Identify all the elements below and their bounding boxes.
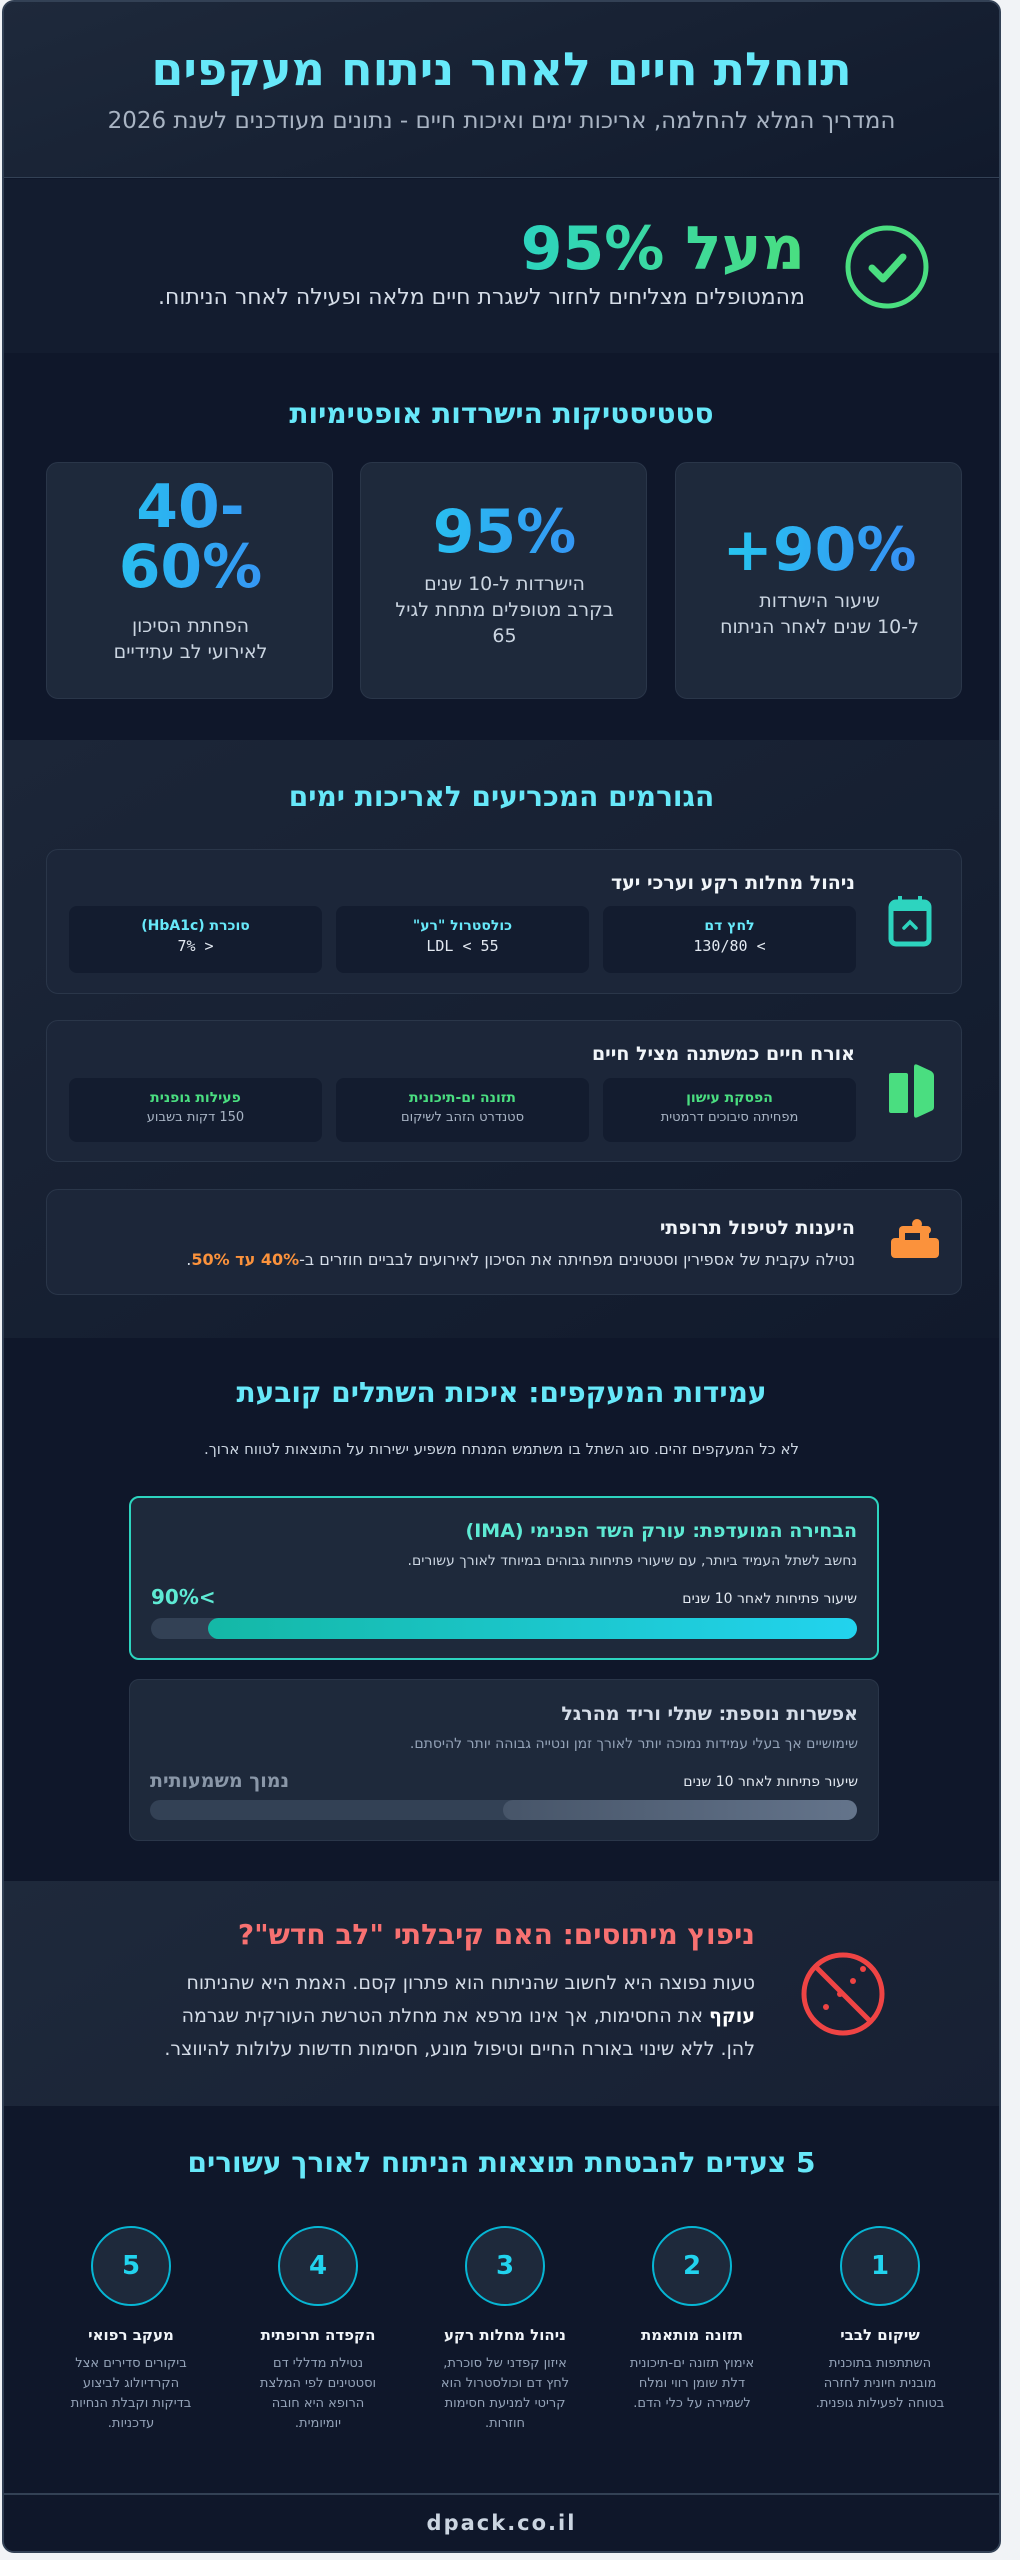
myth body: טעות נפוצה היא לחשוב שהניתוח הוא פתרון קסם. האמת היא שהניתוח <box>187 1972 755 1994</box>
stat card 2 <box>360 462 647 699</box>
step 4 <box>260 2226 376 2431</box>
subtitle: המדריך המלא להחלמה, אריכות ימים ואיכות חיים - נתונים מעודכנים לשנת 2026 <box>108 108 895 134</box>
header section <box>4 2 999 178</box>
step 1: 1 <box>871 2251 889 2281</box>
step 5: הקרדיולוג לביצוע <box>83 2376 179 2391</box>
sub box: diet: תזונה ים-תיכונית <box>409 1090 516 1106</box>
graft card: vein: שימושיים אך בעלי עמידות נמוכה יותר לאורך זמן ונטייה גבוהה יותר להיסתם. <box>410 1736 858 1752</box>
step 2: לשמירה על כלי הדם. <box>633 2396 751 2411</box>
heading: הגורמים המכריעים לאריכות ימים <box>289 780 714 813</box>
step 4: יומיומית. <box>295 2416 341 2431</box>
progress bar vein <box>150 1800 857 1820</box>
step 1: מובנית חיונית לחזרה <box>824 2376 936 2391</box>
step 5: 5 <box>122 2251 140 2281</box>
step 2: אימוץ תזונה ים-תיכונית <box>630 2356 754 2371</box>
myth body: עוקף את החסימות, אך אינו מרפא את מחלת הטרשת העורקית שגרמה <box>182 2005 755 2027</box>
title: אורח חיים כמשתנה מציל חיים <box>592 1043 855 1065</box>
heading: 5 צעדים להבטחת תוצאות הניתוח לאורך עשורים <box>187 2146 816 2179</box>
myth body <box>164 1972 755 2060</box>
section: graft durability <box>4 1338 999 1881</box>
step 3: 3 <box>496 2251 514 2281</box>
stat card 2: 95% <box>433 497 576 567</box>
sub box: smoking: הפסקת עישון <box>686 1090 773 1106</box>
icon: ban circle <box>802 1952 884 2036</box>
stat card 1: +90% <box>723 515 916 585</box>
step 1: השתתפות בתוכנית <box>829 2356 931 2371</box>
graft card: IMA: שיעור פתיחות לאחר 10 שנים <box>682 1591 857 1607</box>
sub box: blood pressure: 130/80 < <box>693 937 766 955</box>
step 3: חוזרות. <box>485 2416 525 2431</box>
stat card 3: 40- <box>136 472 245 542</box>
step 5: מעקב רפואי <box>88 2326 174 2344</box>
stat card 2: 65 <box>492 625 517 647</box>
progress bar IMA <box>151 1618 857 1639</box>
stat card 3: לאירועי לב עתידיים <box>114 641 267 663</box>
sub box: activity <box>69 1078 322 1142</box>
section: longevity factors <box>4 740 999 1338</box>
factor card 2 <box>46 1020 962 1162</box>
sub box: cholesterol: כולסטרול "רע" <box>413 918 512 934</box>
stat card 1: שיעור הישרדות <box>759 590 880 612</box>
myth heading: ניפוץ מיתוסים: האם קיבלתי "לב חדש"? <box>238 1918 755 1951</box>
stat card 2: הישרדות ל-10 שנים <box>424 573 585 595</box>
step 3: ניהול מחלות רקע <box>444 2326 566 2344</box>
step 1: בטוחה לפעילות גופנית. <box>816 2396 944 2411</box>
section: myth busting <box>4 1881 999 2106</box>
step 2: 2 <box>683 2251 701 2281</box>
icon: medicine bag <box>891 1219 939 1258</box>
sub box: blood pressure: לחץ דם <box>704 918 755 934</box>
title: היענות לטיפול תרופתי <box>660 1217 855 1239</box>
sub box: cholesterol: LDL < 55 <box>426 937 499 955</box>
sub box: activity: 150 דקות בשבוע <box>147 1110 244 1125</box>
graft card: IMA: 90%< <box>151 1585 216 1609</box>
description: נטילה עקבית של אספירין וסטטינים מפחיתה את הסיכון לאירועים לבביים חוזרים ב-40% עד 50%. <box>186 1250 855 1269</box>
step 5: ביקורים סדירים אצל <box>75 2356 187 2371</box>
heading: סטטיסטיקות הישרדות אופטימיות <box>289 397 714 430</box>
step 4: 4 <box>309 2251 327 2281</box>
sub box: cholesterol <box>336 906 589 973</box>
sub box: sugar: סוכרת (HbA1c) <box>141 918 250 934</box>
step 2: דלת שומן רווי ומלח <box>639 2376 745 2391</box>
stat card 3: הפחתת הסיכון <box>132 615 249 637</box>
graft card: vein: אפשרות נוספת: שתלי וריד מהרגל <box>561 1703 858 1725</box>
hero stat section <box>4 179 999 353</box>
sub box: sugar <box>69 906 322 973</box>
step 4: הרופא היא חובה <box>272 2396 364 2411</box>
graft card: IMA <box>129 1496 879 1660</box>
icon: calendar <box>888 896 932 946</box>
stat card 1 <box>675 462 962 699</box>
step 5: בדיקות וקבלת הנחיות <box>71 2396 191 2411</box>
intro text: לא כל המעקפים זהים. סוג השתל בו משתמש המנתח משפיע ישירות על התוצאות לטווח ארוך. <box>204 1440 799 1458</box>
step 2: תזונה מותאמת <box>641 2326 743 2344</box>
sub box: activity: פעילות גופנית <box>150 1090 241 1106</box>
stat card 3: 60% <box>119 532 262 602</box>
hero description: מהמטופלים מצליחים לחזור לשגרת חיים מלאה ופעילה לאחר הניתוח. <box>158 285 805 310</box>
sub box: smoking <box>603 1078 856 1142</box>
graft card: IMA: נחשב לשתל העמיד ביותר, עם שיעורי פתיחות גבוהים במיוחד לאורך עשורים. <box>408 1553 857 1569</box>
icon: check circle <box>846 226 928 308</box>
factor card 3 <box>46 1189 962 1295</box>
icon: green bars <box>889 1064 934 1118</box>
step 4: וסטטינים לפי המלצת <box>260 2376 376 2391</box>
step 2 <box>630 2226 754 2411</box>
step 5 <box>70 2226 191 2431</box>
stat card 2: בקרב מטופלים מתחת לגיל <box>395 599 614 621</box>
stat card 3 <box>46 462 333 699</box>
sub box: diet: סטנדרט הזהב לשיקום <box>401 1110 524 1125</box>
step 3: לחץ דם וכולסטרול הוא <box>441 2376 569 2391</box>
step 1 <box>816 2226 944 2411</box>
step 4: הקפדה תרופתית <box>261 2326 375 2344</box>
graft card: vein: נמוך משמעותית <box>150 1770 289 1792</box>
sub box: blood pressure <box>603 906 856 973</box>
title: ניהול מחלות רקע וערכי יעד <box>611 872 855 894</box>
heading: עמידות המעקפים: איכות השתלים קובעת <box>236 1376 767 1409</box>
step 1: שיקום לבבי <box>840 2326 920 2344</box>
graft card: vein <box>129 1679 879 1841</box>
footer: dpack.co.il <box>427 2511 576 2535</box>
section: survival stats <box>4 353 999 740</box>
step 3: איזון קפדני של סוכרת, <box>443 2356 567 2371</box>
sub box: smoking: מפחיתה סיבוכים דרמטית <box>661 1110 798 1125</box>
myth body: להן. ללא שינוי באורח החיים וטיפול מונע, חסימות חדשות עלולות להיווצר. <box>164 2038 755 2060</box>
title: תוחלת חיים לאחר ניתוח מעקפים <box>151 42 852 96</box>
factor card 1 <box>46 849 962 994</box>
footer <box>4 2493 999 2555</box>
graft card: vein: שיעור פתיחות לאחר 10 שנים <box>683 1774 858 1790</box>
step 5: עדכניות. <box>108 2416 154 2431</box>
sub box: diet <box>336 1078 589 1142</box>
step 3 <box>441 2226 569 2431</box>
hero number: מעל 95% <box>521 214 805 284</box>
stat card 1: ל-10 שנים לאחר הניתוח <box>720 616 919 638</box>
step 3: קריטי למניעת חסימות <box>445 2396 565 2411</box>
step 4: נטילת מדללי דם <box>273 2356 363 2371</box>
graft card: IMA: הבחירה המועדפת: עורק השד הפנימי (IMA) <box>466 1520 857 1542</box>
sub box: sugar: 7% > <box>177 937 214 955</box>
section: 5 steps <box>4 2106 999 2493</box>
